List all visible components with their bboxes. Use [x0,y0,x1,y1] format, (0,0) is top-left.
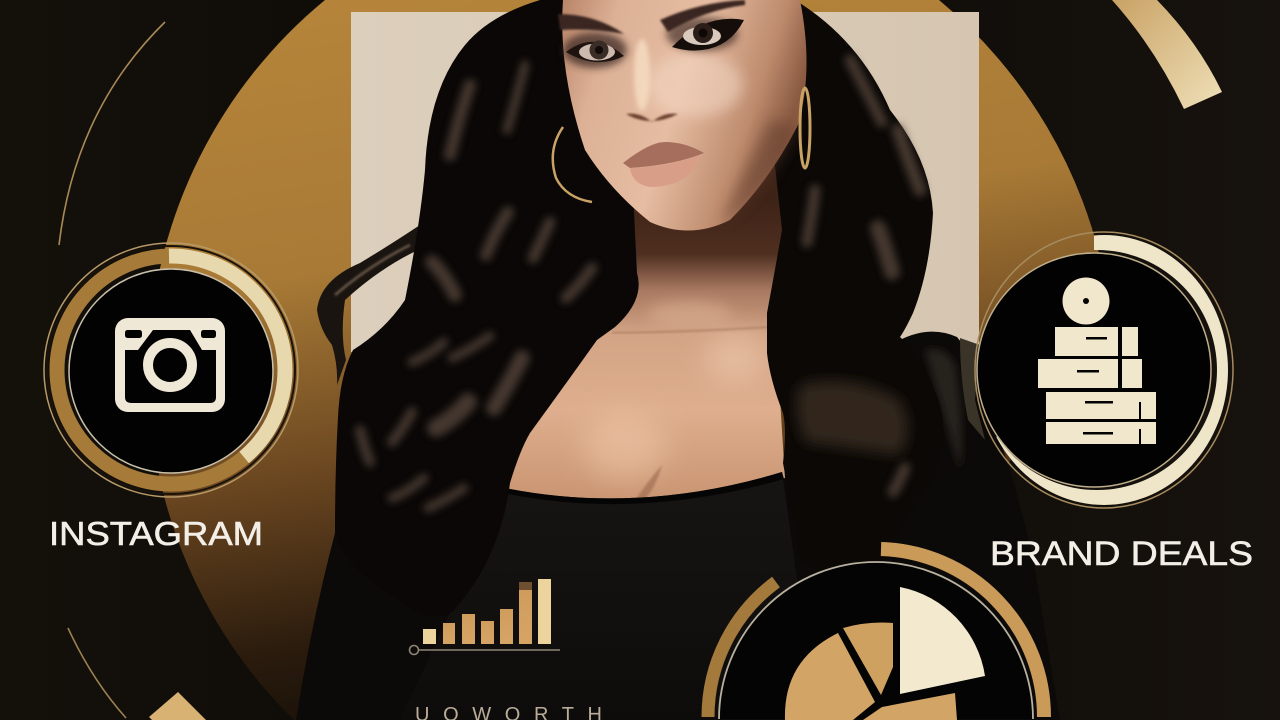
decorative arc: lower left [68,628,126,718]
chest highlight right [705,334,765,382]
right hair mass [767,0,943,575]
cheek highlight [647,53,743,117]
cleavage shadow [634,465,662,502]
dress front [400,472,830,720]
beige backdrop panel [351,12,979,352]
decorative arc: top right [1112,0,1222,109]
black circle [719,562,1033,719]
pie slice: top gold [843,623,893,695]
nose highlight [634,39,650,111]
label: brand deals: BRAND DEALS [990,535,1253,573]
large gold disc [148,0,1105,720]
jaw shadow [720,120,798,225]
decorative corner: bottom left [149,692,206,720]
thin circle outline [719,562,1033,719]
nose shadow [626,114,678,122]
right eyebrow [660,0,745,32]
inner black circle [977,253,1211,487]
pie slice: cream [900,587,985,694]
gold ring [57,256,285,484]
black sleeve and shoulders [296,332,1060,720]
brand deals badge [975,232,1233,508]
pie chart badge [708,549,1044,720]
hair soft highlights [360,60,920,508]
bar chart [410,579,560,654]
outer thin ring [975,232,1233,508]
neck and chest skin [505,130,795,503]
instagram badge [44,243,298,497]
thin hair lock [317,225,420,385]
left eyebrow [558,14,624,34]
left hair mass [335,0,639,616]
neck highlight [648,301,732,329]
face [562,0,807,231]
collarbone line [612,327,770,333]
label: instagram: INSTAGRAM [49,515,263,552]
pie slice: bottom right gold [863,693,957,720]
icon: camera [115,318,225,412]
dress neckline band [505,472,784,504]
decorative arc: upper left [59,22,165,245]
cream progress arc [977,235,1228,505]
gold arc right [881,549,1044,717]
sleeve sheen [925,349,962,470]
pie slice: left gold [785,633,875,720]
lips [623,142,704,187]
icon: stacked boxes [1038,278,1156,444]
inner black circle [69,269,273,473]
right eye [666,17,744,51]
left eye [563,32,627,68]
sleeve sparkle edge [960,338,985,440]
cream progress arc [168,248,292,463]
outer thin ring [44,243,298,497]
right hair gloss band [797,381,908,455]
lock highlight [335,245,410,295]
left hoop earring [553,127,592,202]
right hoop earring [800,88,810,168]
woman portrait [296,0,1060,720]
gold arc left [708,582,776,717]
dark separator ring [47,246,295,494]
chest highlight centre [583,411,667,479]
